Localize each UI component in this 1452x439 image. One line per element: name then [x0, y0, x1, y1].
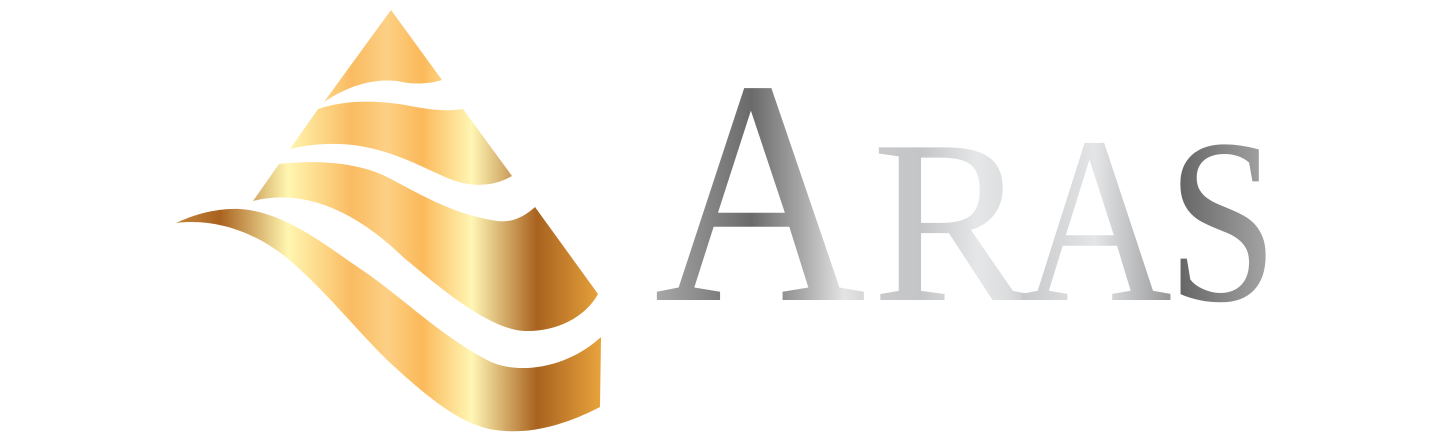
third band — [253, 162, 598, 331]
letter R: R — [872, 93, 1031, 351]
bottom wave — [176, 209, 601, 431]
icon: gold pyramid with waves — [176, 10, 601, 431]
wordmark — [654, 15, 1278, 370]
letter A: A — [654, 15, 866, 370]
letter S: S — [1167, 91, 1278, 351]
second band — [290, 102, 512, 185]
pyramid top — [324, 10, 442, 102]
letter small A: A — [1020, 89, 1172, 352]
